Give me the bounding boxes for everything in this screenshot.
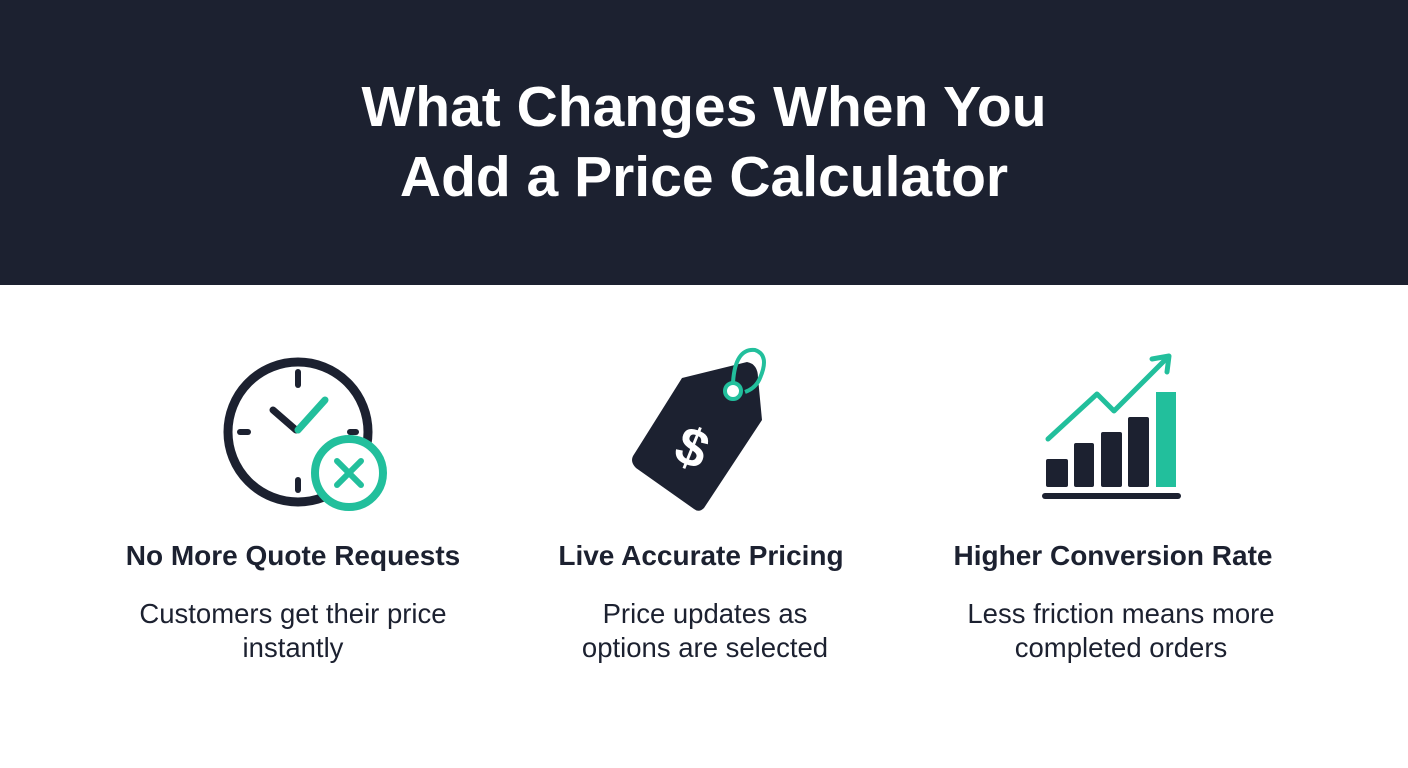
text: live pricing: options are selected bbox=[582, 632, 828, 663]
text: conversion: completed orders bbox=[1015, 632, 1227, 663]
heading: live pricing: Live Accurate Pricing bbox=[558, 540, 844, 571]
text: live pricing: Price updates as bbox=[603, 598, 807, 629]
text: quote requests: Customers get their price bbox=[139, 598, 447, 629]
icon: growth chart bbox=[1042, 356, 1181, 499]
text: conversion: Less friction means more bbox=[967, 598, 1275, 629]
icon: price tag bbox=[632, 350, 764, 511]
text: live pricing bbox=[582, 598, 828, 663]
heading: quote requests: No More Quote Requests bbox=[126, 540, 460, 571]
text: quote requests: instantly bbox=[243, 632, 343, 663]
heading: conversion: Higher Conversion Rate bbox=[954, 540, 1272, 571]
text: quote requests bbox=[139, 598, 447, 663]
title: What Changes When You bbox=[361, 75, 1047, 139]
header band bbox=[0, 0, 1408, 285]
icon: clock with x bbox=[228, 362, 383, 507]
text: conversion bbox=[967, 598, 1275, 663]
icon: price tag: $ bbox=[667, 415, 717, 481]
title: Add a Price Calculator bbox=[400, 145, 1008, 209]
title bbox=[361, 75, 1047, 209]
